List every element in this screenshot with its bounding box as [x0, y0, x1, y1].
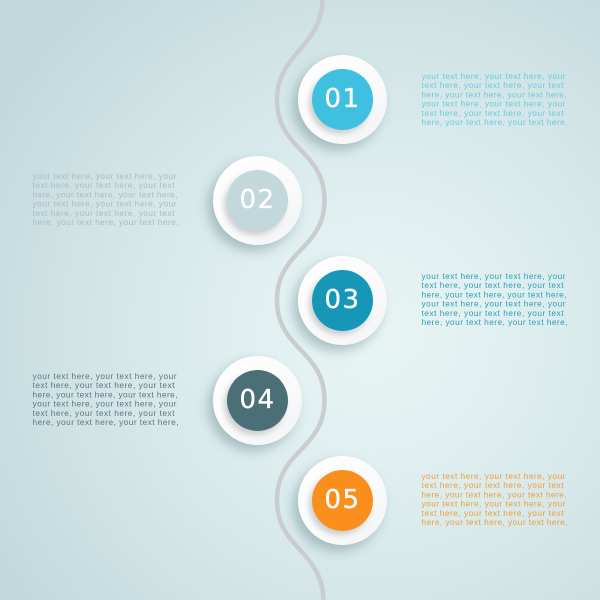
text block 03: text here, your text here, your text [422, 280, 564, 290]
text block 03: your text here, your text here, your [422, 299, 566, 309]
step 01 circle [298, 55, 387, 144]
number 04 [227, 370, 288, 430]
step 02 circle [213, 156, 302, 244]
text block 02: here, your text here, your text here, [32, 217, 178, 227]
text block 05: text here, your text here, your text [422, 508, 564, 518]
text block 02 [32, 171, 178, 227]
text block 01 [422, 71, 568, 127]
text block 02: your text here, your text here, your [32, 199, 177, 209]
number 05: 05 [324, 484, 361, 514]
text block 02: text here, your text here, your text [32, 208, 175, 218]
text block 02: here, your text here, your text here, [32, 189, 178, 199]
text block 05 [422, 471, 568, 527]
text block 04: here, your text here, your text here, [32, 389, 178, 399]
text block 01: text here, your text here, your text [422, 80, 564, 90]
text block 05: here, your text here, your text here, [422, 489, 566, 499]
text block 03: here, your text here, your text here, [422, 289, 566, 299]
text block 03: text here, your text here, your text [422, 308, 564, 318]
text block 04: your text here, your text here, your [32, 371, 177, 381]
text block 01: your text here, your text here, your [422, 71, 566, 81]
number 03 [312, 270, 373, 330]
text block 01: here, your text here, your text here, [422, 117, 568, 127]
number 04: 04 [239, 384, 276, 414]
text block 01: text here, your text here, your text [422, 108, 564, 118]
number 01 [312, 69, 373, 130]
text block 05: here, your text here, your text here, [422, 517, 568, 527]
text block 01: your text here, your text here, your [422, 99, 566, 109]
number 03: 03 [324, 284, 361, 314]
step 04 circle [213, 356, 302, 444]
number 05 [312, 470, 373, 530]
text block 03: here, your text here, your text here, [422, 317, 568, 327]
text block 03 [422, 271, 568, 327]
number 02: 02 [239, 184, 276, 214]
text block 03: your text here, your text here, your [422, 271, 566, 281]
text block 04: your text here, your text here, your [32, 399, 177, 409]
text block 04: text here, your text here, your text [32, 408, 175, 418]
step 03 circle [298, 256, 387, 344]
text block 05: your text here, your text here, your [422, 499, 566, 509]
step 05 circle [298, 456, 387, 544]
number 01: 01 [324, 84, 361, 114]
text block 04: text here, your text here, your text [32, 380, 175, 390]
text block 01: here, your text here, your text here, [422, 89, 566, 99]
text block 04 [32, 371, 178, 427]
text block 05: your text here, your text here, your [422, 471, 566, 481]
text block 04: here, your text here, your text here, [32, 417, 178, 427]
text block 02: text here, your text here, your text [32, 180, 175, 190]
text block 05: text here, your text here, your text [422, 480, 564, 490]
number 02 [227, 170, 288, 230]
text block 02: your text here, your text here, your [32, 171, 177, 181]
